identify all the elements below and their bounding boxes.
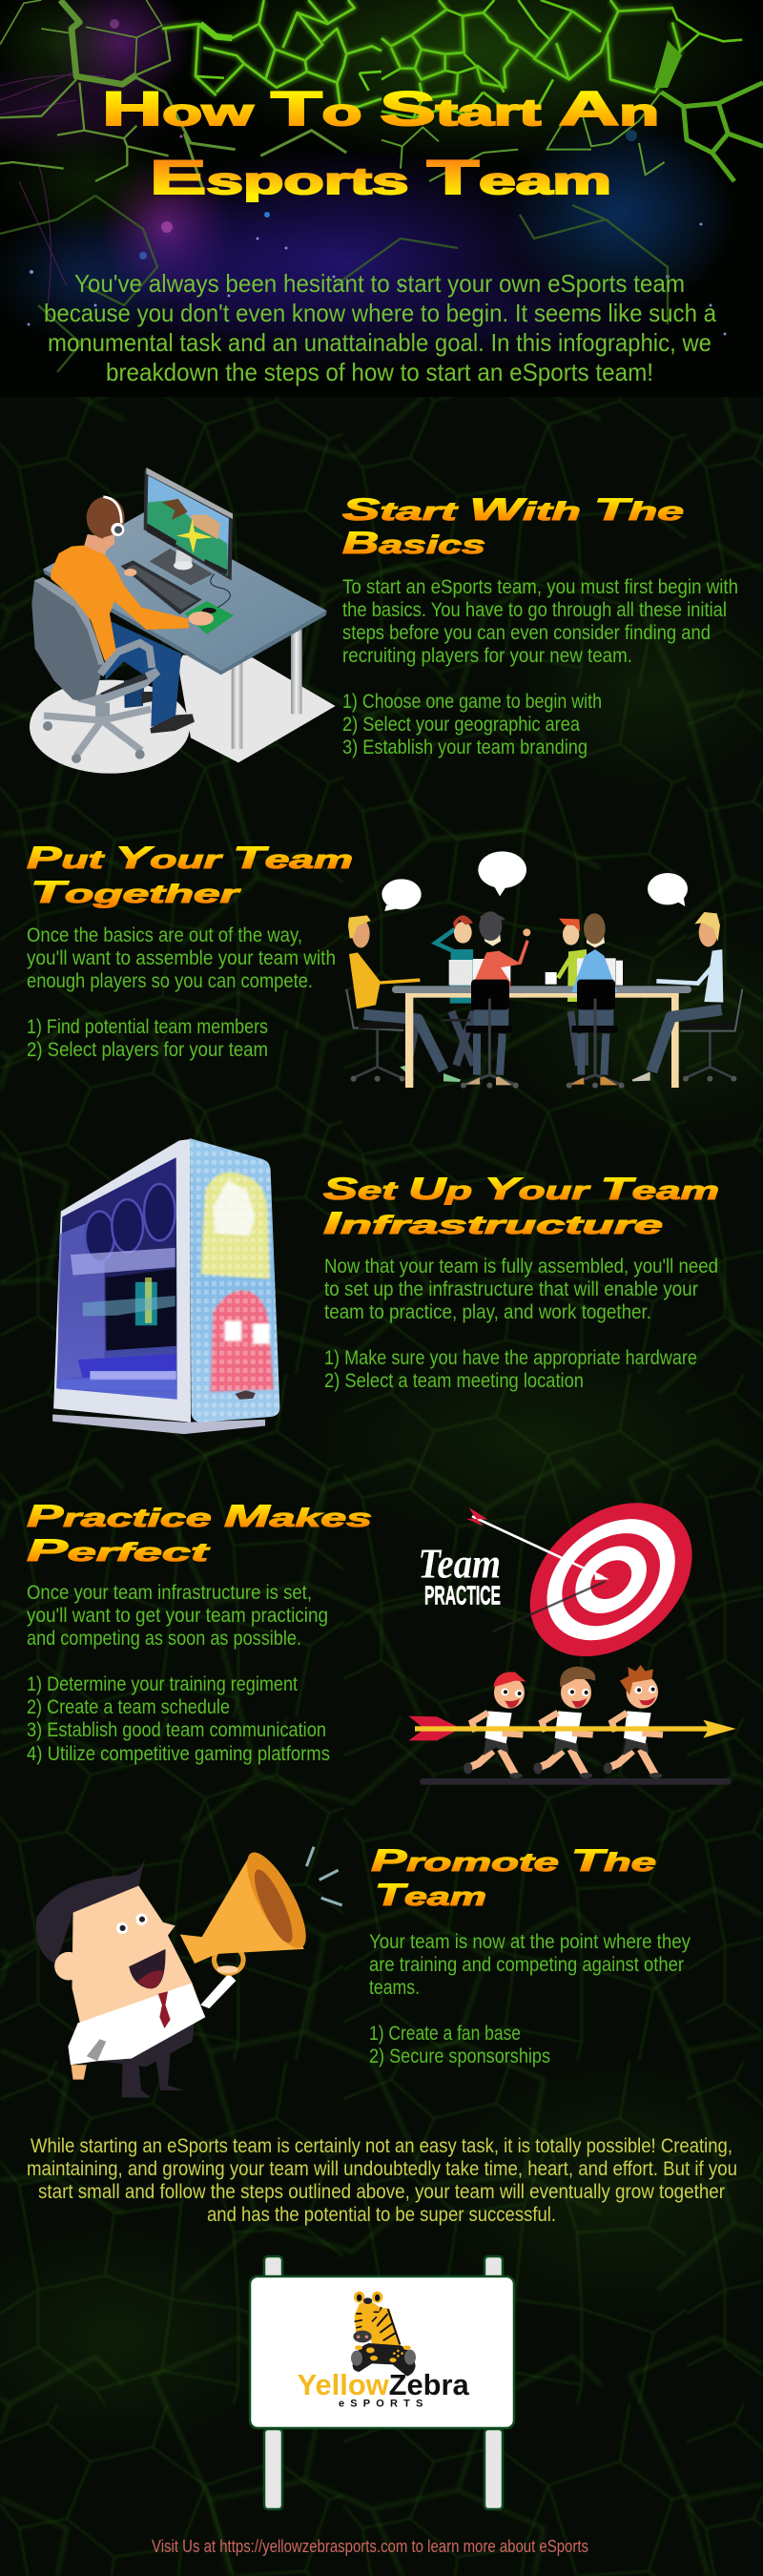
sign posts: [264, 2256, 503, 2509]
text: start with the basics: 3) Establish your team branding: [342, 737, 588, 758]
lattice bright: [162, 0, 382, 107]
text: put your team together: 2) Select players for your team: [27, 1039, 268, 1061]
heading: promote the team: P romote T he: [371, 1843, 656, 1878]
text: promote the team: teams.: [369, 1977, 420, 1999]
back figure two: [567, 913, 625, 1089]
zebra logo: eSPORTS: [339, 2399, 423, 2410]
footer text: Visit Us at https://yellowzebrasports.com to learn more about eSports: [152, 2537, 588, 2556]
zebra logo: [298, 2292, 470, 2410]
heading: put your team together: P ut Y our T eam: [27, 841, 353, 875]
text: set up your team infrastructure: team to practice, play, and work together.: [324, 1301, 651, 1323]
text: start with the basics: 2) Select your geographic area: [342, 714, 580, 736]
text: put your team together: 1) Find potential team members: [27, 1016, 268, 1038]
text: set up your team infrastructure: [324, 1256, 718, 1392]
boy three: [604, 1665, 663, 1778]
text: practice makes perfect: 2) Create a team schedule: [27, 1696, 230, 1718]
title: [102, 82, 659, 204]
right man: [632, 912, 742, 1082]
text: promote the team: Your team is now at the point where they: [369, 1931, 691, 1953]
intro text: monumental task and an unattainable goal. In this infographic, we: [48, 328, 711, 357]
heading: practice makes perfect: P ractice M akes: [27, 1499, 372, 1533]
text: set up your team infrastructure: 1) Make sure you have the appropriate hardware: [324, 1347, 697, 1369]
heading: put your team together: [27, 841, 353, 909]
title: H ow T o S tart A n: [102, 82, 659, 135]
title: E sports T eam: [150, 151, 611, 204]
carried arrow: [408, 1716, 736, 1740]
lattice muted left: [0, 0, 346, 191]
text: put your team together: Once the basics are out of the way,: [27, 924, 302, 946]
intro text: [44, 269, 716, 386]
text: promote the team: are training and competing against other: [369, 1954, 684, 1976]
header banner background: [0, 0, 763, 397]
heading: put your team together: T ogether: [31, 875, 241, 909]
intro text: You've always been hesitant to start your own eSports team: [74, 269, 685, 298]
text: practice makes perfect: 4) Utilize competitive gaming platforms: [27, 1743, 330, 1765]
heading: start with the basics: B asics: [342, 526, 485, 560]
illustration: team practice: [408, 1471, 736, 1785]
closing paragraph: and has the potential to be super successful.: [207, 2204, 556, 2226]
text: promote the team: 2) Secure sponsorships: [369, 2046, 550, 2067]
text: start with the basics: recruiting players for your new team.: [342, 645, 632, 667]
text: start with the basics: 1) Choose one game to begin with: [342, 691, 602, 713]
text: practice makes perfect: you'll want to get your team practicing: [27, 1605, 328, 1627]
heading: promote the team: T eam: [375, 1878, 486, 1912]
boy one: [464, 1672, 526, 1778]
front left person: [436, 915, 510, 1066]
illustration: gamer at desk: [30, 467, 336, 774]
illustration: man with megaphone: [36, 1845, 342, 2097]
text: practice makes perfect: 3) Establish good team communication: [27, 1719, 326, 1741]
lattice bright glow: [162, 0, 680, 107]
text: put your team together: [27, 924, 336, 1061]
text: practice makes perfect: and competing as soon as possible.: [27, 1628, 301, 1650]
text: practice makes perfect: 1) Determine your training regiment: [27, 1673, 298, 1695]
illustration: team meeting: [346, 851, 742, 1089]
closing paragraph: [27, 2135, 737, 2226]
heading: promote the team: [371, 1843, 656, 1912]
zebra logo: YellowZebra: [298, 2369, 470, 2401]
table: [392, 986, 691, 1088]
intro text: because you don't even know where to begin. It seems like such a: [44, 299, 716, 327]
back figure one: [461, 911, 530, 1089]
text: promote the team: [369, 1931, 691, 2067]
heading: set up your team infrastructure: [323, 1172, 719, 1240]
text: practice makes perfect: [27, 1582, 330, 1765]
illustration: gaming pc case: [52, 1138, 279, 1434]
arrow in target: [465, 1507, 609, 1631]
heading: practice makes perfect: P erfect: [27, 1533, 210, 1568]
text: promote the team: 1) Create a fan base: [369, 2023, 521, 2045]
text: put your team together: enough players so you can compete.: [27, 970, 313, 992]
text: start with the basics: [342, 576, 738, 758]
left man: [346, 915, 461, 1082]
text: set up your team infrastructure: 2) Select a team meeting location: [324, 1370, 584, 1392]
speech bubbles: [382, 851, 688, 911]
sign with logo: [250, 2256, 514, 2509]
heading: start with the basics: S tart W ith T he: [342, 492, 684, 527]
team practice label: [418, 1540, 501, 1610]
front right person: [546, 919, 623, 1066]
team practice label: Team: [418, 1540, 501, 1587]
team practice label: PRACTICE: [424, 1581, 501, 1610]
heading: set up your team infrastructure: I nfrastructure: [323, 1206, 663, 1240]
text: put your team together: you'll want to assemble your team with: [27, 947, 336, 969]
intro text: breakdown the steps of how to start an eSports team!: [106, 358, 653, 386]
heading: practice makes perfect: [27, 1499, 372, 1568]
text: start with the basics: steps before you can even consider finding and: [342, 622, 711, 644]
boy two: [533, 1667, 595, 1778]
text: set up your team infrastructure: Now that your team is fully assembled, you'll need: [324, 1256, 718, 1278]
heading: start with the basics: [342, 492, 684, 560]
text: practice makes perfect: Once your team infrastructure is set,: [27, 1582, 312, 1604]
shout lines: [306, 1847, 342, 1905]
target: [500, 1471, 722, 1688]
text: set up your team infrastructure: to set up the infrastructure that will enable your: [324, 1278, 698, 1300]
heading: set up your team infrastructure: S et U p Y our T eam: [323, 1172, 719, 1206]
